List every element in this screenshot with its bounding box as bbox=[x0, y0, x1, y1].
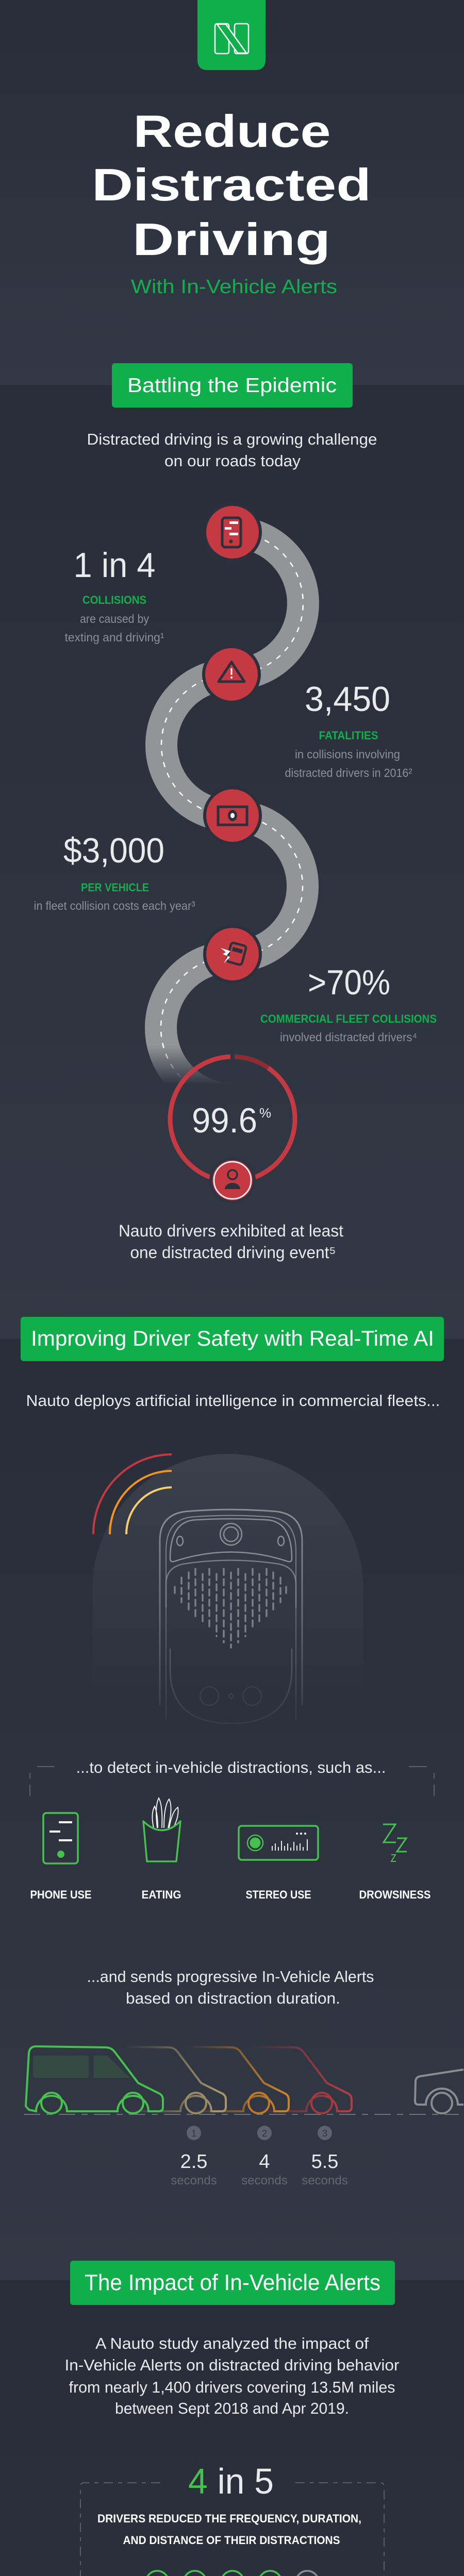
stat: $3,000: in fleet collision costs each year³ bbox=[34, 899, 195, 912]
intro text bbox=[87, 430, 377, 470]
alert timings: 3 bbox=[322, 2128, 327, 2139]
icon: phone use: PHONE USE bbox=[30, 1888, 92, 1901]
text: to detect distractions: ...to detect in-vehicle distractions, such as... bbox=[76, 1758, 386, 1776]
text: Nauto deploys: Nauto deploys artificial intelligence in commercial fleets... bbox=[26, 1392, 440, 1410]
badge: Impact of In-Vehicle Alerts bbox=[70, 2261, 395, 2305]
badge: Battling the Epidemic bbox=[112, 363, 353, 408]
badge: Battling the Epidemic: Battling the Epidemic bbox=[127, 375, 337, 397]
stat: 3,450: 3,450 bbox=[305, 680, 390, 719]
text: study paragraph: In-Vehicle Alerts on distracted driving behavior bbox=[65, 2356, 399, 2374]
icon: eating bbox=[141, 1798, 181, 1901]
icon: phone circle bbox=[205, 504, 260, 560]
callout: 4 in 5: DRIVERS REDUCED THE FREQUENCY, DURATION, bbox=[97, 2512, 361, 2525]
icon: drowsiness: DROWSINESS bbox=[359, 1888, 431, 1901]
stat: >70%: involved distracted drivers⁴ bbox=[280, 1030, 417, 1044]
stat: 1 in 4: texting and driving¹ bbox=[65, 631, 164, 644]
text: study paragraph bbox=[65, 2334, 399, 2417]
vans illustration bbox=[24, 2046, 463, 2114]
text: Nauto drivers: one distracted driving event⁵ bbox=[130, 1243, 336, 1262]
intro text: Distracted driving is a growing challenge bbox=[87, 430, 377, 448]
icon: stereo use bbox=[239, 1826, 318, 1901]
stat: 1 in 4 bbox=[65, 546, 164, 644]
text: sends alerts bbox=[87, 1968, 374, 2007]
alert timings: 4 bbox=[259, 2151, 270, 2173]
device illustration bbox=[92, 1454, 363, 1723]
icon: crash circle bbox=[205, 926, 260, 982]
title: Distracted bbox=[92, 159, 371, 210]
stat: >70% bbox=[260, 963, 437, 1044]
stat: >70%: >70% bbox=[308, 963, 390, 1002]
alert timings bbox=[171, 2126, 348, 2188]
stat: 3,450 bbox=[285, 680, 412, 779]
stat: $3,000: $3,000 bbox=[63, 831, 164, 870]
text: sends alerts: based on distraction duration. bbox=[126, 1989, 340, 2007]
stat: 3,450: FATALITIES bbox=[319, 729, 378, 742]
stat: 3,450: in collisions involving bbox=[295, 748, 400, 761]
subtitle: With In-Vehicle Alerts bbox=[131, 276, 337, 298]
icon: drowsiness bbox=[359, 1824, 431, 1901]
badge: Improving Driver Safety bbox=[21, 1317, 444, 1361]
text: Nauto drivers bbox=[119, 1222, 343, 1262]
alert timings: 2 bbox=[262, 2128, 267, 2139]
road bbox=[161, 532, 303, 1099]
callout: 4 in 5: 4 in 5 bbox=[188, 2461, 274, 2501]
stat: 1 in 4: COLLISIONS bbox=[82, 594, 146, 606]
title: Reduce bbox=[133, 106, 331, 157]
text: study paragraph: from nearly 1,400 drivers covering 13.5M miles bbox=[69, 2378, 395, 2396]
icon: warning circle bbox=[204, 647, 259, 702]
intro text: on our roads today bbox=[164, 452, 301, 470]
text: sends alerts: ...and sends progressive In-Vehicle Alerts bbox=[87, 1968, 374, 1986]
callout: 4 in 5: AND DISTANCE OF THEIR DISTRACTIONS bbox=[123, 2534, 340, 2547]
ring: 99.6%: 99.6 bbox=[192, 1101, 257, 1140]
alert timings: 2.5 bbox=[180, 2151, 207, 2173]
ring: 99.6% bbox=[170, 1057, 295, 1202]
alert timings: seconds bbox=[171, 2174, 217, 2188]
stat: $3,000 bbox=[34, 831, 195, 912]
logo bbox=[197, 0, 266, 70]
icon: phone use bbox=[30, 1813, 92, 1901]
text: study paragraph: between Sept 2018 and Apr 2019. bbox=[115, 2399, 349, 2417]
badge: Improving Driver Safety: Improving Driver Safety with Real-Time AI bbox=[31, 1326, 434, 1350]
alert timings: 5.5 bbox=[311, 2151, 338, 2173]
stat: $3,000: PER VEHICLE bbox=[81, 881, 149, 894]
text: study paragraph: A Nauto study analyzed the impact of bbox=[95, 2334, 369, 2352]
text: Nauto drivers: Nauto drivers exhibited at least bbox=[119, 1222, 343, 1240]
title: Driving bbox=[132, 214, 330, 265]
icon: stereo use: STEREO USE bbox=[245, 1888, 311, 1901]
stat: 3,450: distracted drivers in 2016² bbox=[285, 766, 412, 779]
alert timings: seconds bbox=[302, 2174, 348, 2188]
stat: >70%: COMMERCIAL FLEET COLLISIONS bbox=[260, 1012, 437, 1025]
alert timings: seconds bbox=[241, 2174, 288, 2188]
badge: Impact of In-Vehicle Alerts: The Impact of In-Vehicle Alerts bbox=[85, 2270, 380, 2295]
callout: 4 in 5 bbox=[80, 2461, 384, 2576]
icon: eating: EATING bbox=[141, 1888, 181, 1901]
stat: 1 in 4: are caused by bbox=[80, 612, 149, 625]
icon: money circle bbox=[205, 788, 260, 843]
alert timings: 1 bbox=[191, 2128, 196, 2139]
stat: 1 in 4: 1 in 4 bbox=[73, 546, 156, 585]
ring: 99.6%: % bbox=[259, 1105, 271, 1121]
title bbox=[92, 106, 371, 265]
